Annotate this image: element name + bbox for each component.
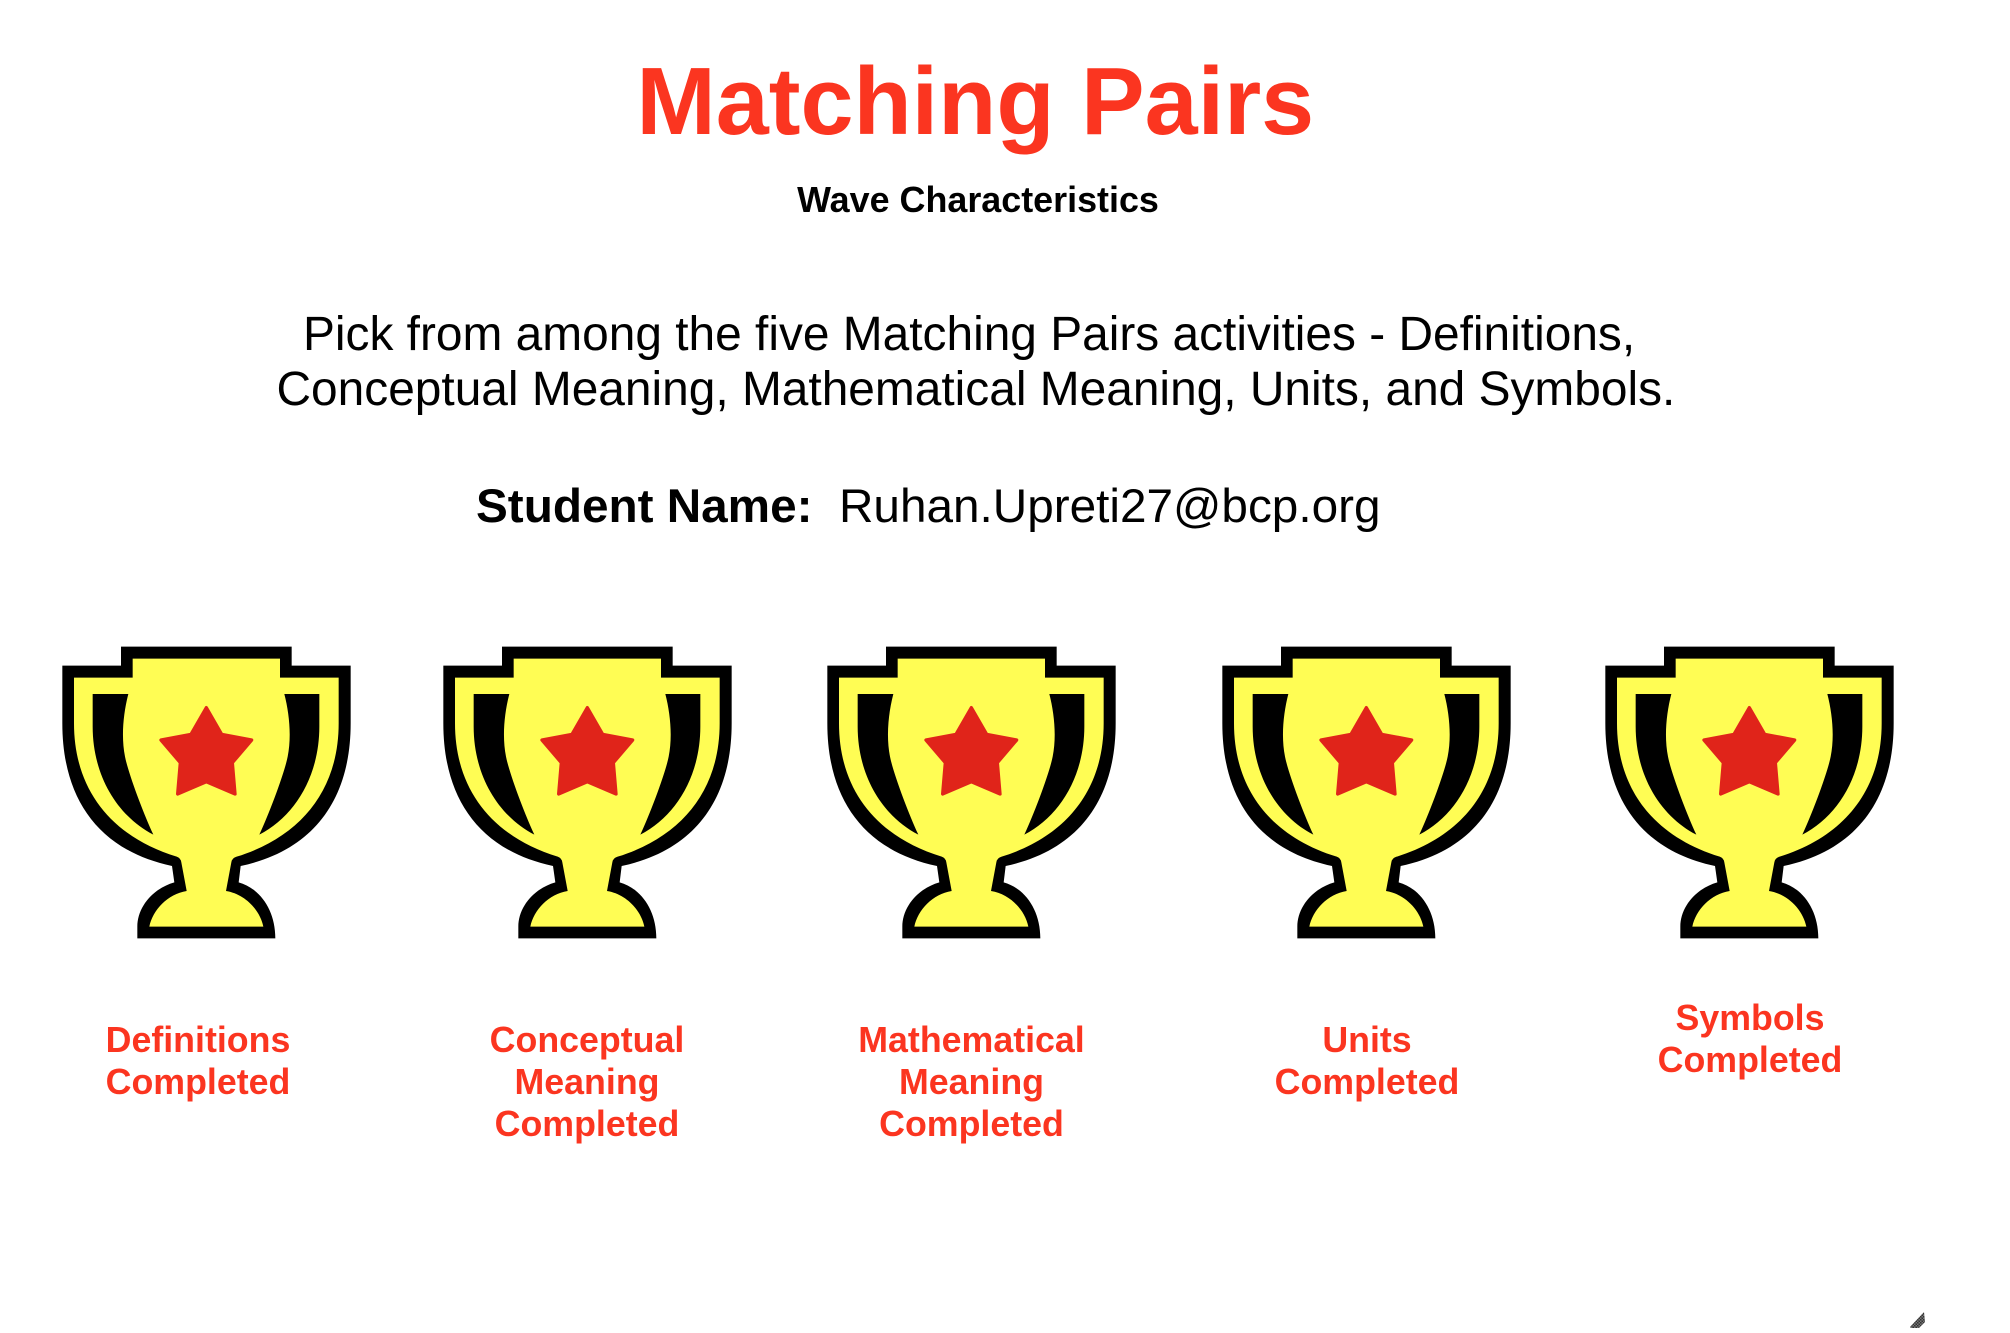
icon: trophy symbols (1605, 646, 1894, 938)
label: mathematical meaning completed: Meaning (899, 1062, 1044, 1102)
icon: trophy definitions (62, 646, 351, 938)
instructions text (276, 308, 1675, 416)
student name: Student Name: Ruhan.Upreti27@bcp.org (476, 480, 1380, 533)
label: symbols completed: Completed (1658, 1040, 1842, 1080)
icon: trophy units (1222, 646, 1511, 938)
instructions text: Conceptual Meaning, Mathematical Meaning, Units, and Symbols. (276, 363, 1675, 416)
icon: trophy conceptual meaning (443, 646, 732, 938)
label: units completed (1275, 1020, 1459, 1102)
label: conceptual meaning completed (490, 1020, 684, 1144)
label: mathematical meaning completed (858, 1020, 1085, 1144)
label: conceptual meaning completed: Meaning (514, 1062, 660, 1102)
icon: trophy mathematical meaning (827, 646, 1116, 938)
label: definitions completed (106, 1020, 290, 1102)
label: definitions completed: Completed (106, 1062, 290, 1102)
label: mathematical meaning completed: Mathematical (858, 1020, 1085, 1060)
label: conceptual meaning completed: Conceptual (490, 1020, 684, 1060)
label: definitions completed: Definitions (106, 1020, 290, 1060)
label: units completed: Units (1322, 1020, 1412, 1060)
label: symbols completed (1658, 998, 1842, 1080)
label: mathematical meaning completed: Completed (879, 1104, 1064, 1144)
label: symbols completed: Symbols (1675, 998, 1824, 1038)
label: conceptual meaning completed: Completed (495, 1104, 679, 1144)
title: Matching Pairs (636, 49, 1314, 155)
label: units completed: Completed (1275, 1062, 1459, 1102)
instructions text: Pick from among the five Matching Pairs activities - Definitions, (303, 308, 1635, 361)
icon: resize handle (1910, 1312, 1925, 1328)
subtitle: Wave Characteristics (797, 180, 1159, 220)
